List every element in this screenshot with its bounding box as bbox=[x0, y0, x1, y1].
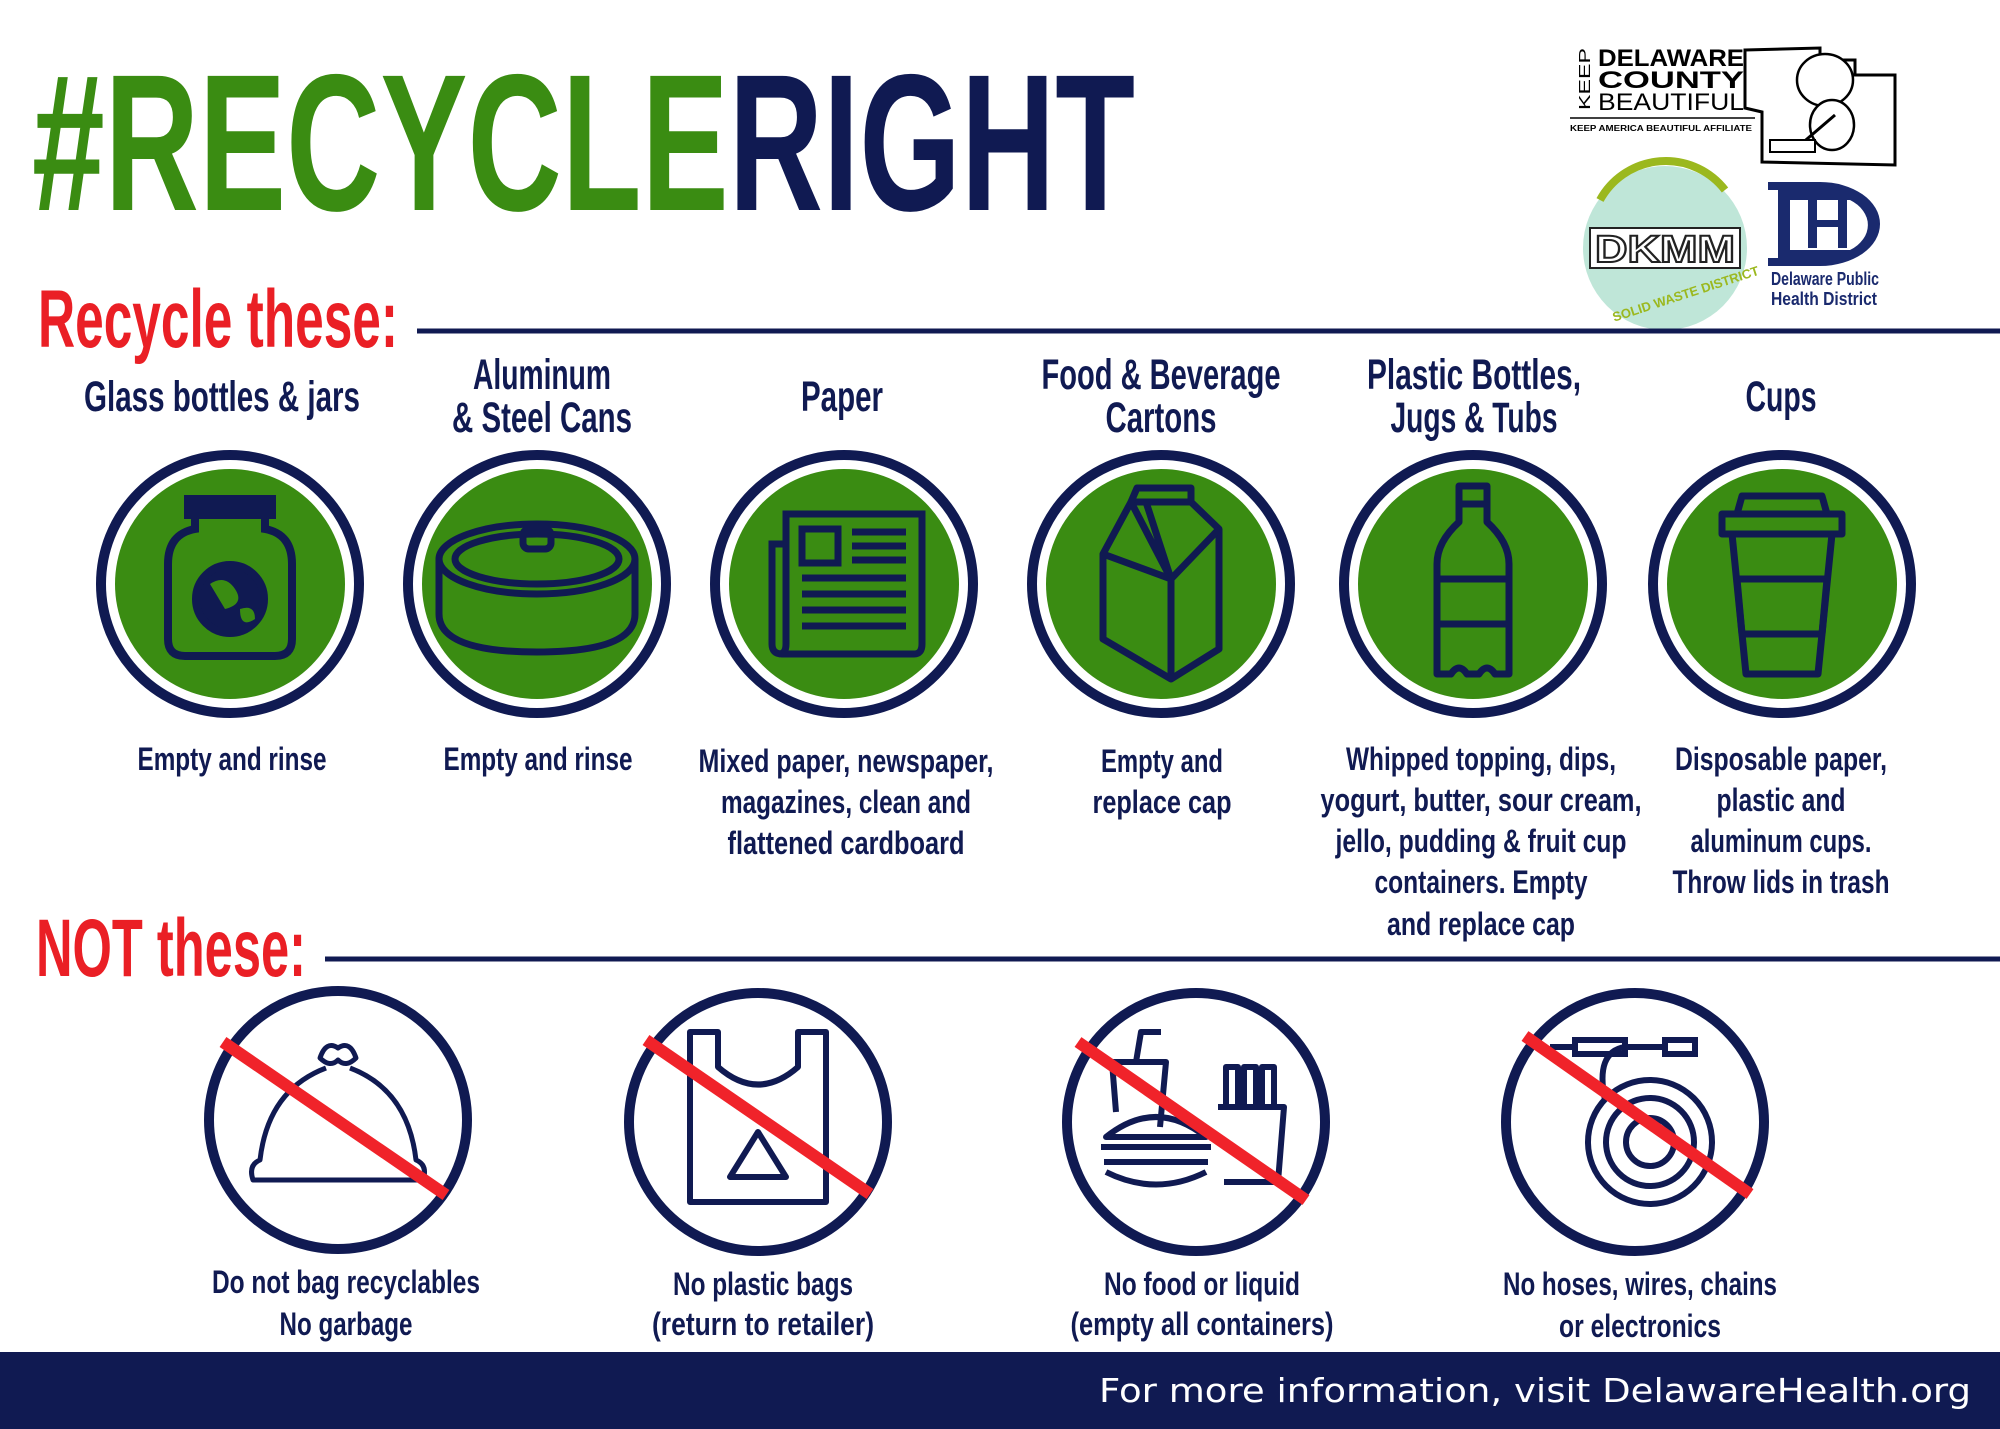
captions: not these: No hoses, wires, chains bbox=[1503, 1266, 1777, 1302]
column headings: Cups bbox=[1746, 373, 1816, 421]
captions: recycle these: Empty and bbox=[1101, 743, 1223, 779]
captions: recycle these: replace cap bbox=[1092, 784, 1232, 820]
logo: Delaware Public Health District: Delaware Public bbox=[1771, 269, 1879, 289]
captions: recycle these bbox=[138, 741, 1890, 942]
title: #RECYCLERIGHT bbox=[32, 34, 1135, 252]
captions: recycle these: containers. Empty bbox=[1374, 864, 1588, 900]
captions: not these: (return to retailer) bbox=[652, 1306, 874, 1342]
captions: recycle these: Empty and rinse bbox=[138, 741, 326, 777]
icon: plastic bottle bbox=[1344, 455, 1602, 713]
icon: no hose bbox=[1506, 993, 1764, 1251]
logo: Keep Delaware County Beautiful: COUNTY bbox=[1598, 67, 1744, 94]
logo: Keep Delaware County Beautiful bbox=[1570, 45, 1895, 165]
captions: not these: or electronics bbox=[1559, 1308, 1721, 1344]
icon: can bbox=[408, 455, 666, 713]
footer bar bbox=[0, 1352, 2000, 1429]
column headings: Food & Beverage bbox=[1042, 351, 1280, 399]
heading: Recycle these: Recycle these: bbox=[38, 274, 398, 365]
column headings: Plastic Bottles, bbox=[1367, 351, 1581, 399]
logo: DKMM bbox=[1583, 161, 1761, 330]
icon: cup bbox=[1653, 455, 1911, 713]
captions: not these: Do not bag recyclables bbox=[212, 1264, 480, 1300]
captions: not these: (empty all containers) bbox=[1070, 1306, 1334, 1342]
column headings bbox=[84, 351, 1816, 442]
icon: carton bbox=[1032, 455, 1290, 713]
captions: recycle these: Disposable paper, bbox=[1675, 741, 1887, 777]
captions: not these: No garbage bbox=[280, 1306, 412, 1342]
icon: no food bbox=[1067, 993, 1325, 1251]
icon: glass jar bbox=[101, 455, 359, 713]
column headings: Cartons bbox=[1106, 394, 1216, 442]
icon: no bag bbox=[209, 991, 467, 1249]
column headings: Glass bottles & jars bbox=[84, 373, 360, 421]
captions: recycle these: Whipped topping, dips, bbox=[1346, 741, 1616, 777]
captions: recycle these: Throw lids in trash bbox=[1672, 864, 1890, 900]
captions: recycle these: and replace cap bbox=[1387, 906, 1575, 942]
captions: recycle these: magazines, clean and bbox=[721, 784, 971, 820]
column headings: Aluminum bbox=[473, 351, 611, 399]
captions: recycle these: aluminum cups. bbox=[1690, 823, 1872, 859]
captions: recycle these: Empty and rinse bbox=[444, 741, 632, 777]
heading: NOT these: NOT these: bbox=[36, 903, 306, 994]
captions: not these: No plastic bags bbox=[673, 1266, 853, 1302]
captions: not these bbox=[212, 1264, 1777, 1344]
column headings: & Steel Cans bbox=[452, 394, 632, 442]
captions: recycle these: plastic and bbox=[1716, 782, 1846, 818]
captions: recycle these: Mixed paper, newspaper, bbox=[698, 743, 994, 779]
logo: Delaware Public Health District: Health District bbox=[1771, 289, 1877, 309]
column headings: Jugs & Tubs bbox=[1390, 394, 1558, 442]
footer bar: For more information, visit DelawareHealth.org bbox=[1099, 1371, 1971, 1410]
logo: Keep Delaware County Beautiful: KEEP bbox=[1577, 48, 1594, 110]
captions: not these: No food or liquid bbox=[1104, 1266, 1300, 1302]
captions: recycle these: jello, pudding & fruit cup bbox=[1335, 823, 1626, 859]
logo: Keep Delaware County Beautiful: BEAUTIFUL bbox=[1598, 89, 1744, 116]
logo: Keep Delaware County Beautiful: DELAWARE bbox=[1598, 45, 1744, 72]
logo: DKMM: SOLID WASTE DISTRICT bbox=[1611, 263, 1761, 325]
captions: recycle these: yogurt, butter, sour cream, bbox=[1320, 782, 1642, 818]
icon: no plastic bag bbox=[629, 993, 887, 1251]
logo: Delaware Public Health District bbox=[1768, 182, 1880, 309]
column headings: Paper bbox=[801, 373, 883, 421]
captions: recycle these: flattened cardboard bbox=[728, 825, 964, 861]
logo: DKMM: DKMM bbox=[1595, 229, 1735, 271]
icon: newspaper bbox=[715, 455, 973, 713]
logo: Keep Delaware County Beautiful: KEEP AMERICA BEAUTIFUL AFFILIATE bbox=[1570, 124, 1753, 133]
